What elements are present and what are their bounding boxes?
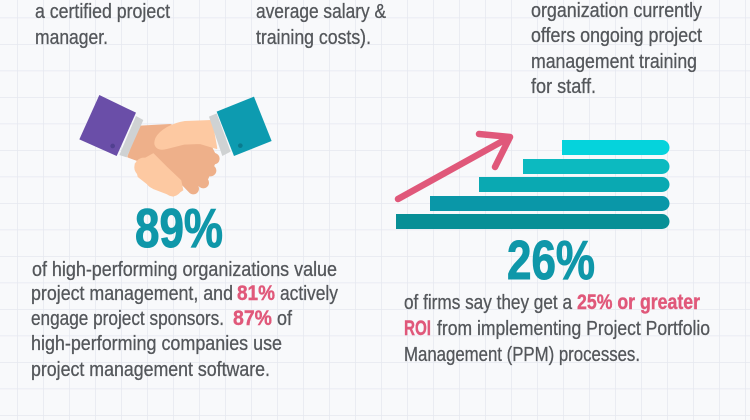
text: high-performing organizations: 87% — [233, 307, 272, 330]
text: certified project manager: a certified project — [35, 1, 170, 23]
text: high-performing organizations: high-performing companies use — [31, 333, 282, 355]
text: high-performing organizations: actively — [280, 283, 338, 305]
text: ongoing training — [531, 0, 702, 98]
text: high-performing organizations — [31, 259, 338, 381]
text: ROI from PPM: ROI — [404, 317, 431, 340]
text: ongoing training: offers ongoing project — [531, 25, 702, 47]
icon part: left cuff — [119, 116, 143, 157]
text: high-performing organizations: project management software. — [31, 359, 270, 381]
text: high-performing organizations: of high-performing organizations value — [32, 259, 337, 281]
text: ongoing training: organization currently — [531, 0, 702, 22]
text: ongoing training: management training — [531, 51, 697, 73]
text: high-performing organizations: project management, and — [31, 283, 233, 305]
text: ROI from PPM — [404, 291, 710, 366]
text: certified project manager: manager. — [35, 27, 108, 49]
icon: handshake — [79, 95, 272, 196]
icon part: lighter hand upper — [155, 121, 217, 149]
text: high-performing organizations: engage project sponsors. — [31, 308, 224, 330]
text: ROI from PPM: of firms say they get a — [404, 292, 573, 314]
text: ROI from PPM: 25% or greater — [577, 291, 700, 314]
text: ongoing training: for staff. — [531, 76, 596, 98]
text: high-performing organizations: 81% — [237, 282, 275, 305]
chart: stepped bars — [396, 140, 670, 229]
icon part: buttons — [110, 143, 243, 148]
icon part: right sleeve — [217, 97, 272, 156]
icon part: lighter fist fingers — [134, 154, 183, 196]
text: average salary and training costs: average salary & — [256, 1, 387, 23]
text: average salary and training costs — [256, 1, 387, 49]
icon part: darker hand — [128, 125, 217, 189]
icon part: right cuff — [209, 113, 231, 156]
text: ROI from PPM: from implementing Project Portfolio — [437, 318, 710, 340]
stat: 89%: 89% — [135, 197, 223, 259]
icon: upward arrow — [398, 134, 510, 199]
text: certified project manager — [35, 1, 170, 49]
icon part: left sleeve — [79, 95, 136, 156]
text: ROI from PPM: Management (PPM) processes. — [404, 344, 640, 366]
stat: 26%: 26% — [507, 229, 595, 291]
text: average salary and training costs: training costs). — [256, 27, 371, 49]
text: high-performing organizations: of — [277, 308, 292, 330]
